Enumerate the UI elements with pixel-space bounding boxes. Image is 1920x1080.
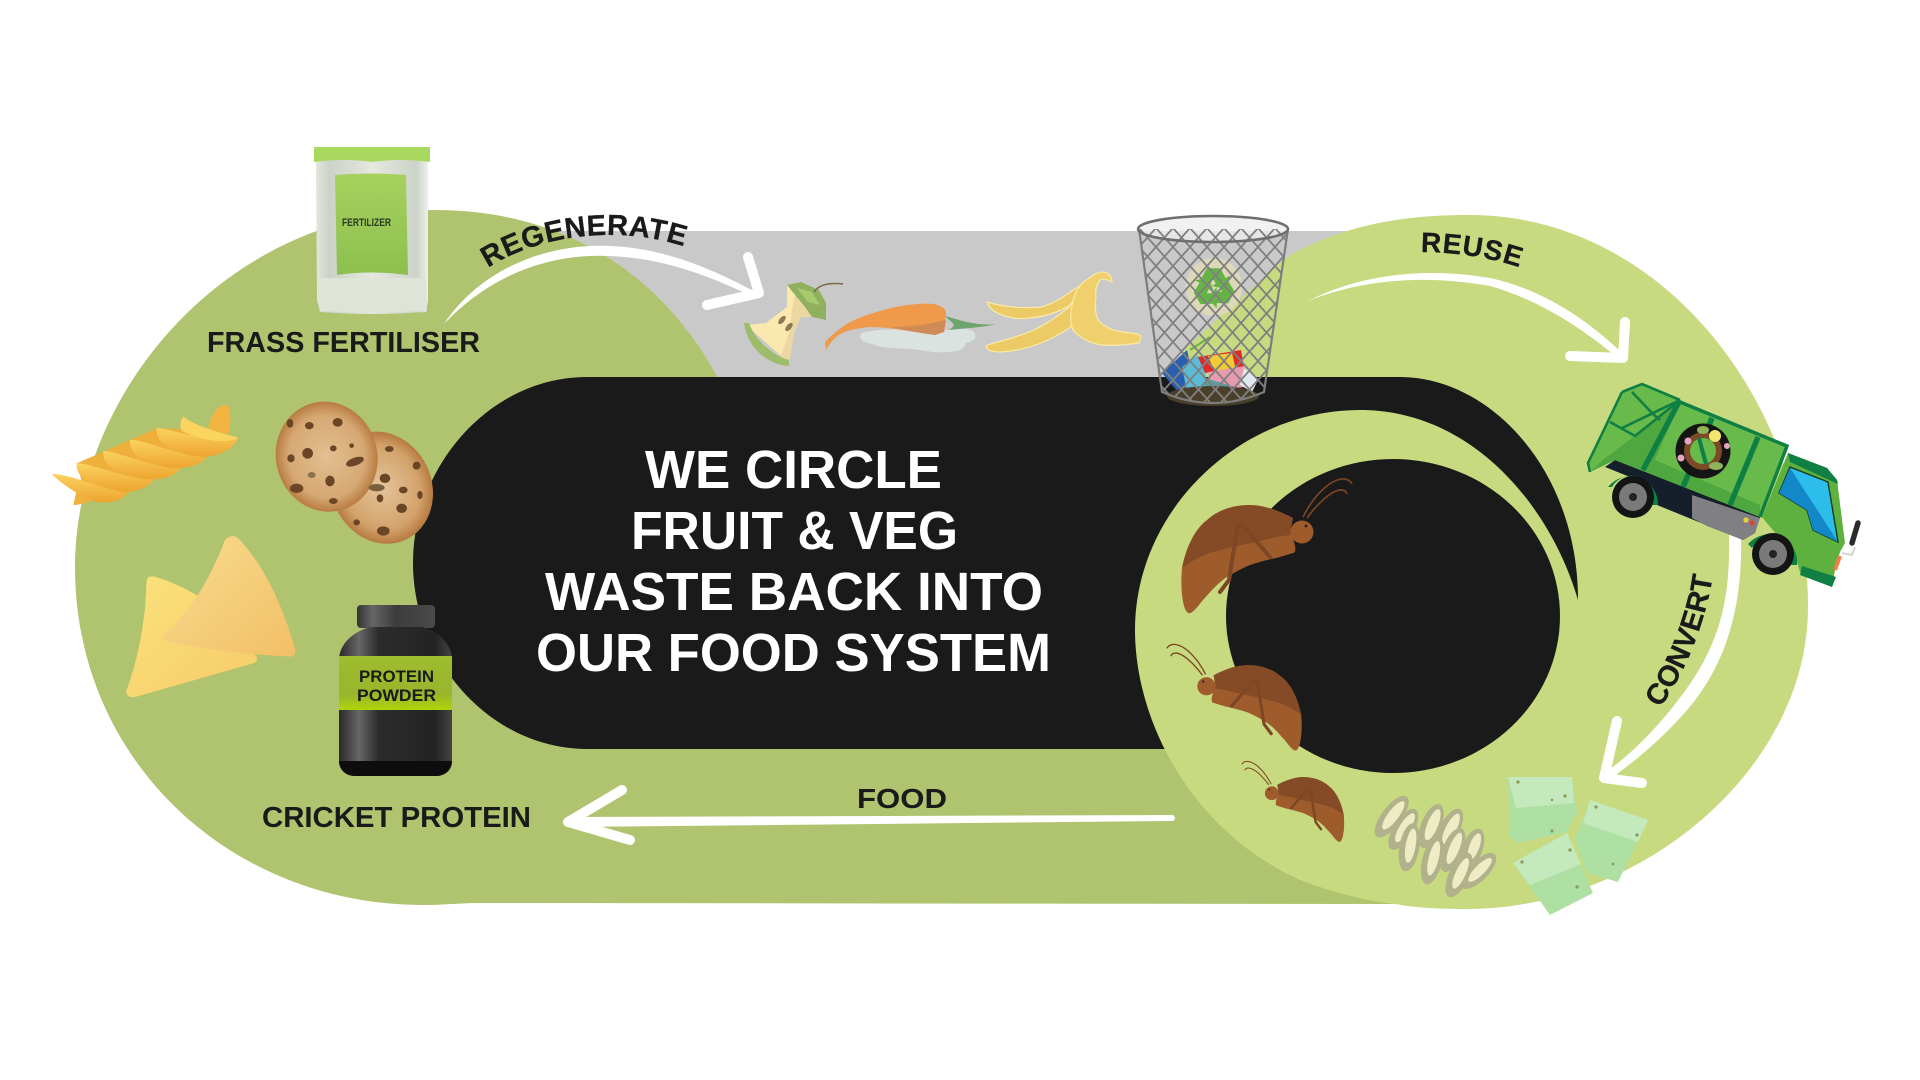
logo ring <box>1676 424 1730 478</box>
heading: main message: FRUIT & VEG <box>631 501 958 561</box>
panel: inner black circle <box>1226 459 1560 773</box>
grey tank <box>1692 495 1760 540</box>
arrow: regenerate <box>444 246 759 324</box>
cab <box>1762 453 1845 587</box>
icon: recycling badge <box>1186 258 1242 316</box>
panel: olive food loop <box>75 210 1400 905</box>
icon: apple core <box>744 282 843 366</box>
label: food: FOOD <box>857 783 947 814</box>
label: reuse: REUSE <box>1422 232 1524 267</box>
label: frass fertiliser: FRASS FERTILISER <box>207 327 480 359</box>
icon: cookies <box>263 390 451 561</box>
icon: protein powder bottle: POWDER <box>357 686 436 705</box>
icon: large cricket <box>1181 479 1352 613</box>
mirror <box>1842 547 1855 555</box>
icon: protein powder bottle <box>339 605 452 776</box>
heading: main message: WASTE BACK INTO <box>545 562 1043 622</box>
heading: main message: WE CIRCLE <box>645 440 942 500</box>
icon: small cricket <box>1242 761 1344 842</box>
icon: protein powder bottle: PROTEIN <box>359 667 434 686</box>
label: convert: CONVERT <box>1647 573 1712 704</box>
panel: light green reuse loop <box>1165 215 1808 909</box>
icon: corn chips <box>126 536 295 697</box>
label: cricket protein: CRICKET PROTEIN <box>262 802 531 834</box>
icon: fusilli pasta <box>52 405 238 505</box>
icon: medium cricket <box>1167 644 1302 750</box>
heading: main message <box>536 440 1051 683</box>
icon: frass fertiliser bag: FERTILIZER <box>342 217 391 229</box>
icon: banana peel <box>987 272 1141 352</box>
green body <box>1588 384 1787 517</box>
panel: light green inner ring <box>1135 410 1700 905</box>
panel: grey waste band <box>540 231 1370 381</box>
arrow: convert <box>1602 535 1741 783</box>
arrow: reuse <box>1308 273 1625 360</box>
label: regenerate on curve: REGENERATE <box>480 214 688 267</box>
icon: garbage truck <box>1588 384 1858 587</box>
icon: recycling bin <box>1130 215 1295 410</box>
icon: cricket eggs <box>1369 791 1502 901</box>
icon: green gel cubes <box>1508 777 1648 915</box>
chassis <box>1605 460 1760 540</box>
wheels <box>1608 476 1658 505</box>
icon: rotten carrot <box>825 304 996 352</box>
panel: black central shape <box>413 377 1578 749</box>
arrow: food <box>568 790 1175 840</box>
heading: main message: OUR FOOD SYSTEM <box>536 623 1051 683</box>
icon: frass fertiliser bag <box>314 147 430 314</box>
trash inside bin <box>1162 337 1259 406</box>
